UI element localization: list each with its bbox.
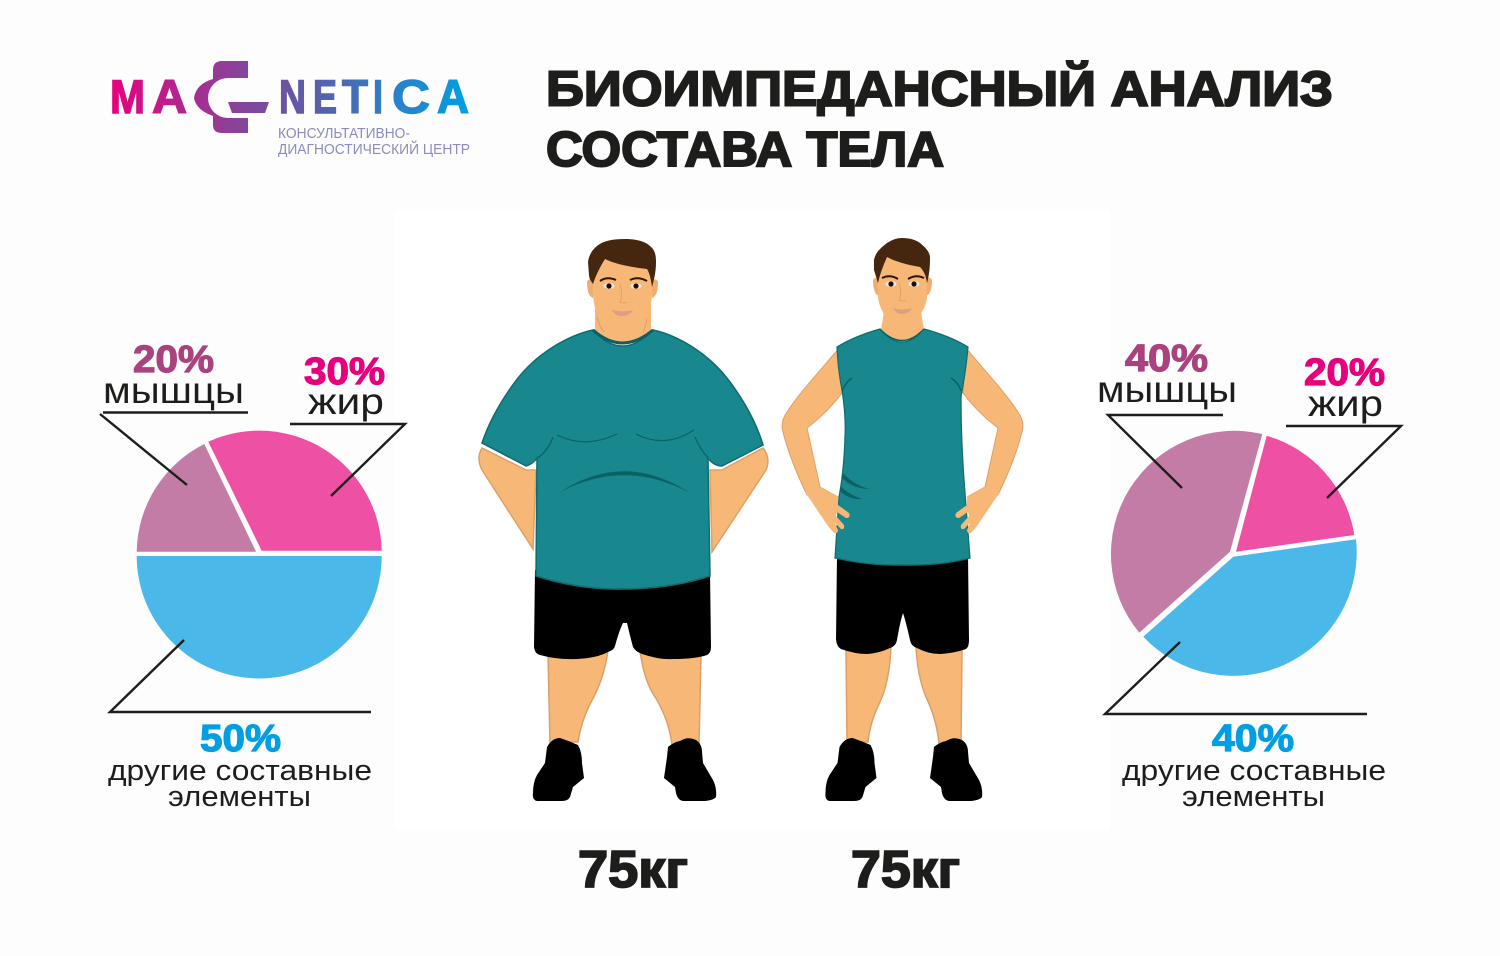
shoes bbox=[533, 738, 716, 801]
legs bbox=[846, 645, 962, 744]
shoes bbox=[825, 738, 982, 801]
hands bbox=[805, 487, 1000, 533]
logo: Magnetica: E bbox=[313, 70, 337, 123]
label: 30% fat left: 30% bbox=[304, 351, 385, 393]
label: 30% fat left bbox=[304, 351, 385, 422]
logo: Magnetica: КОНСУЛЬТАТИВНО- bbox=[278, 125, 410, 142]
label: 20% fat right bbox=[1304, 352, 1385, 424]
neck bbox=[881, 305, 924, 341]
label: 40% other right: 40% bbox=[1212, 718, 1294, 760]
logo: Magnetica: C bbox=[392, 70, 430, 123]
title: БИОИМПЕДАНСНЫЙ АНАЛИЗ bbox=[546, 62, 1333, 116]
title bbox=[546, 62, 1333, 177]
title: СОСТАВА ТЕЛА bbox=[546, 123, 944, 177]
label: 30% fat left: жир bbox=[308, 381, 384, 422]
logo: Magnetica: ДИАГНОСТИЧЕСКИЙ ЦЕНТР bbox=[278, 140, 470, 158]
label: 50% other left: другие составные bbox=[108, 755, 372, 787]
label: 50% other left: элементы bbox=[168, 781, 311, 813]
logo: Magnetica: I bbox=[373, 70, 383, 123]
logo: Magnetica: T bbox=[342, 70, 368, 123]
head bbox=[587, 279, 658, 298]
arms bbox=[479, 448, 768, 552]
t-shirt bbox=[482, 330, 763, 589]
weight label: right figure: 75кг bbox=[851, 841, 960, 899]
logo: Magnetica: A bbox=[437, 70, 469, 123]
logo: Magnetica: M bbox=[110, 70, 145, 123]
pie chart: fit body composition bbox=[1111, 431, 1357, 676]
neck bbox=[595, 300, 651, 344]
label: 20% muscles left: 20% bbox=[133, 339, 214, 381]
shorts bbox=[836, 555, 969, 654]
label: 20% muscles left bbox=[103, 339, 244, 411]
label: 40% muscles right bbox=[1097, 338, 1237, 410]
pie callout lines: left bbox=[100, 412, 405, 712]
weight label: left figure: 75кг bbox=[578, 841, 688, 899]
legs bbox=[548, 650, 701, 745]
label: 40% muscles right: 40% bbox=[1125, 338, 1208, 380]
label: 40% other right: другие составные bbox=[1122, 755, 1386, 787]
figure: fit man bbox=[782, 238, 1023, 801]
logo: Magnetica: A bbox=[152, 70, 187, 123]
label: 50% other left bbox=[108, 718, 372, 813]
logo: Magnetica: N bbox=[279, 70, 306, 123]
pie callout lines: right bbox=[1105, 415, 1401, 714]
label: 40% other right bbox=[1122, 718, 1386, 813]
shirt folds bbox=[842, 378, 961, 391]
pie chart: overweight body composition bbox=[137, 431, 382, 678]
label: 20% fat right: жир bbox=[1308, 383, 1383, 424]
label: 20% muscles left: мышцы bbox=[103, 370, 244, 411]
head bbox=[873, 278, 932, 296]
label: 50% other left: 50% bbox=[200, 718, 281, 760]
shirt folds bbox=[538, 430, 708, 458]
sleeveless shirt bbox=[835, 329, 970, 565]
shorts bbox=[534, 570, 711, 659]
label: 40% other right: элементы bbox=[1182, 781, 1325, 813]
figure: overweight man bbox=[479, 239, 768, 801]
logo: Magnetica bbox=[110, 61, 470, 158]
label: 20% fat right: 20% bbox=[1304, 352, 1385, 394]
label: 40% muscles right: мышцы bbox=[1097, 369, 1237, 410]
arms bbox=[782, 347, 1023, 497]
